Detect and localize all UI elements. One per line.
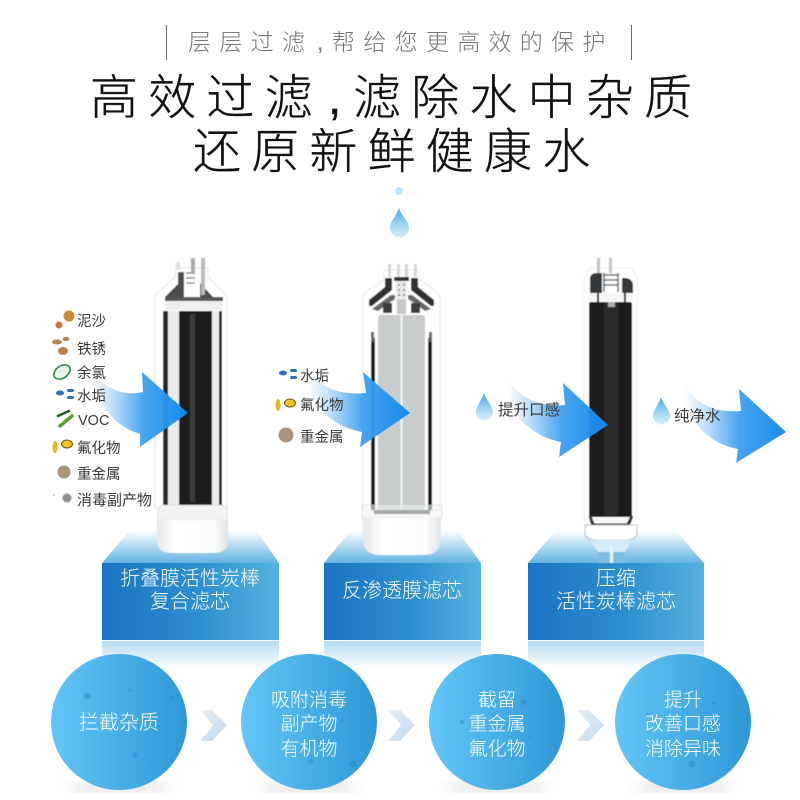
contaminant list 1: 水垢: [77, 388, 106, 405]
contaminant list 1: 重金属: [77, 466, 120, 483]
contaminant list 1: 铁锈: [77, 341, 106, 358]
circle step 4: 提升: [664, 689, 702, 711]
circle step 3: 截留: [478, 689, 516, 711]
header tagline: [166, 25, 632, 60]
box 1 label: 折叠膜活性炭棒: [120, 567, 260, 590]
icon: VOC: [58, 411, 72, 426]
circle step 4: [615, 654, 751, 790]
box 2 label: 反渗透膜滤芯: [342, 579, 462, 602]
title: 还原新鲜健康水: [193, 126, 600, 179]
chevron 3: [577, 710, 604, 741]
icon: fluoride: [276, 399, 296, 411]
icon: heavy metal: [278, 428, 294, 442]
icon: disinfection by-products: [53, 494, 72, 502]
circle step 2: 副产物: [280, 713, 338, 735]
box 1 label: 复合滤芯: [150, 590, 230, 613]
contaminant list 1: 余氯: [77, 364, 106, 382]
taste label: 提升口感: [498, 401, 560, 419]
contaminant list 1: 氟化物: [77, 440, 120, 457]
icon: top water drop: [390, 187, 409, 238]
panel: base box 1: [102, 530, 279, 669]
contaminant list 2: 氟化物: [300, 397, 344, 414]
contaminant list 2: 水垢: [300, 368, 329, 385]
icon: sand: [56, 310, 74, 328]
arrow 3: [504, 357, 608, 457]
arrow 2: [304, 345, 410, 447]
icon: drop before pure water label: [653, 397, 670, 424]
title: ,: [328, 72, 352, 125]
icon: residual chlorine: [51, 362, 73, 382]
box 3 label: 压缩: [596, 567, 636, 590]
title: [90, 72, 702, 179]
circle step 1: [51, 654, 187, 790]
filter cartridge 3: [584, 258, 637, 563]
icon: fluoride: [52, 440, 72, 453]
box 1 label: [120, 567, 260, 613]
contaminant list 1: 泥沙: [77, 313, 106, 330]
chevron 1: [200, 710, 227, 741]
header tagline: 层层过滤: [188, 29, 313, 55]
arrow 4: [681, 362, 786, 463]
icon: limescale: [56, 389, 74, 399]
panel: base box 2: [324, 530, 481, 669]
circle step 3: 氟化物: [468, 738, 526, 760]
circle step 3: 重金属: [468, 713, 526, 735]
circle step 1: 拦截杂质: [79, 711, 159, 734]
icon: heavy metal: [58, 466, 70, 478]
filter cartridge 1: [155, 258, 228, 553]
circle step 2: 有机物: [280, 738, 338, 760]
contaminant list 2: 重金属: [300, 429, 344, 446]
icon: drop before taste label: [476, 393, 493, 420]
box 3 label: [556, 567, 676, 613]
circle step 2: 吸附消毒: [271, 689, 347, 711]
panel: base box 3: [528, 530, 704, 669]
arrow 1: [88, 372, 188, 447]
title: 高效过滤: [90, 72, 323, 125]
circle step 4: 消除异味: [645, 738, 721, 760]
title: 滤除水中杂质: [353, 72, 702, 125]
box 3 label: 活性炭棒滤芯: [556, 590, 676, 613]
circle step 3: [429, 654, 565, 790]
icon: rust: [52, 337, 70, 355]
icon: limescale: [279, 369, 297, 379]
header tagline: 帮给您更高效的保护: [332, 29, 614, 55]
pure water label: 纯净水: [674, 407, 721, 425]
contaminant list 1: [51, 310, 152, 509]
contaminant list 1: VOC: [78, 413, 109, 429]
header tagline: ,: [317, 29, 332, 55]
chevron 2: [388, 710, 415, 741]
circle step 4: 改善口感: [645, 713, 721, 735]
filter cartridge 2: [362, 264, 442, 555]
contaminant list 2: [276, 368, 344, 446]
circle step 2: [241, 654, 377, 790]
circle shadows: [67, 782, 735, 792]
contaminant list 1: 消毒副产物: [77, 492, 152, 509]
